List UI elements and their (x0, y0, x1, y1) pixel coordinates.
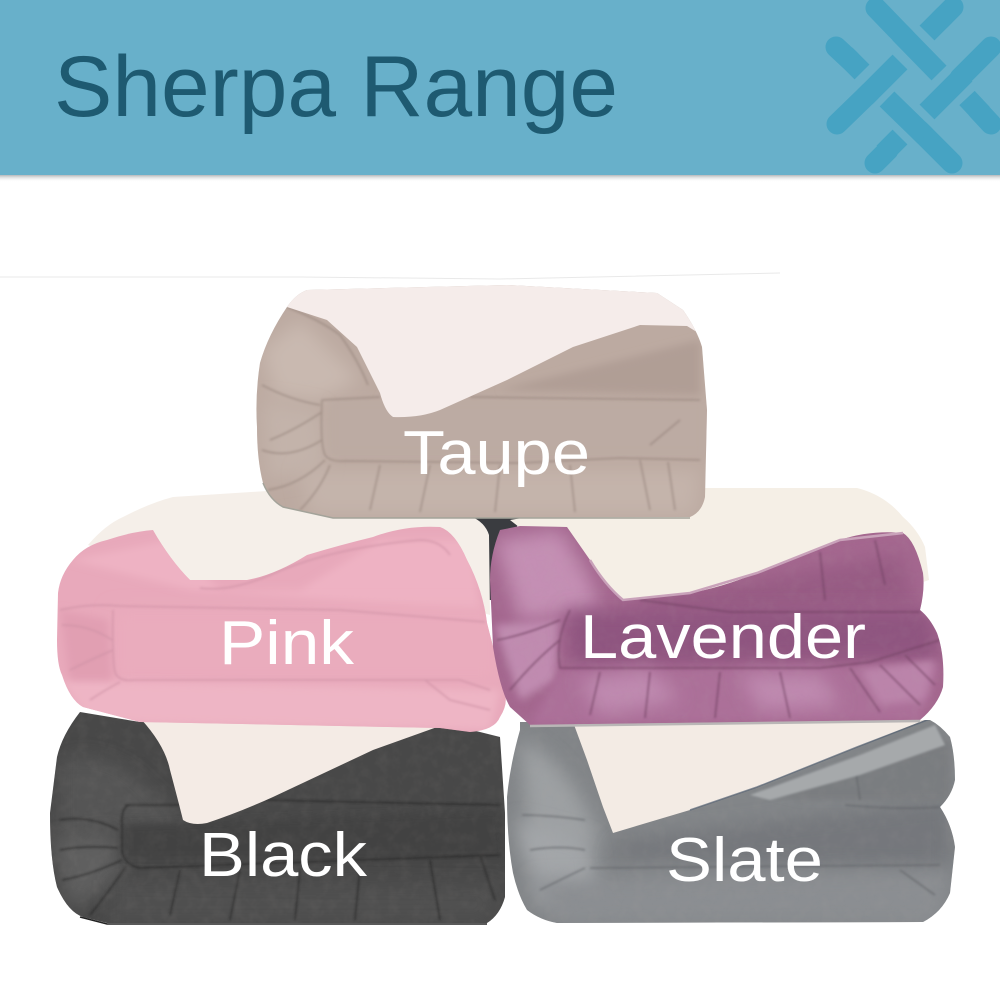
label: Lavender: Lavender (580, 603, 866, 672)
header shadow (0, 175, 1000, 182)
label: Slate: Slate (666, 826, 823, 895)
label: Pink: Pink (219, 609, 355, 678)
light turned edge: slate (750, 725, 945, 800)
blanket cream behind: pink (88, 491, 490, 615)
title: Sherpa Range (54, 39, 618, 135)
label: Black: Black (199, 821, 368, 890)
dark gaps behind stack (470, 515, 520, 600)
faint horizon line (0, 273, 780, 279)
blanket: taupe (250, 280, 715, 525)
sherpa flap: black (144, 722, 435, 824)
blanket cream behind: lavender (510, 488, 929, 610)
label: Taupe: Taupe (403, 419, 590, 488)
sherpa flap: slate (574, 720, 924, 833)
blanket: pink (50, 520, 510, 735)
blanket: slate (507, 720, 955, 923)
outline: black (80, 917, 487, 924)
blanket: black (50, 712, 505, 925)
icon: woven cross logo (836, 7, 991, 163)
blanket: lavender (485, 520, 950, 730)
header band (0, 0, 1000, 175)
sherpa flap: taupe (280, 280, 710, 417)
